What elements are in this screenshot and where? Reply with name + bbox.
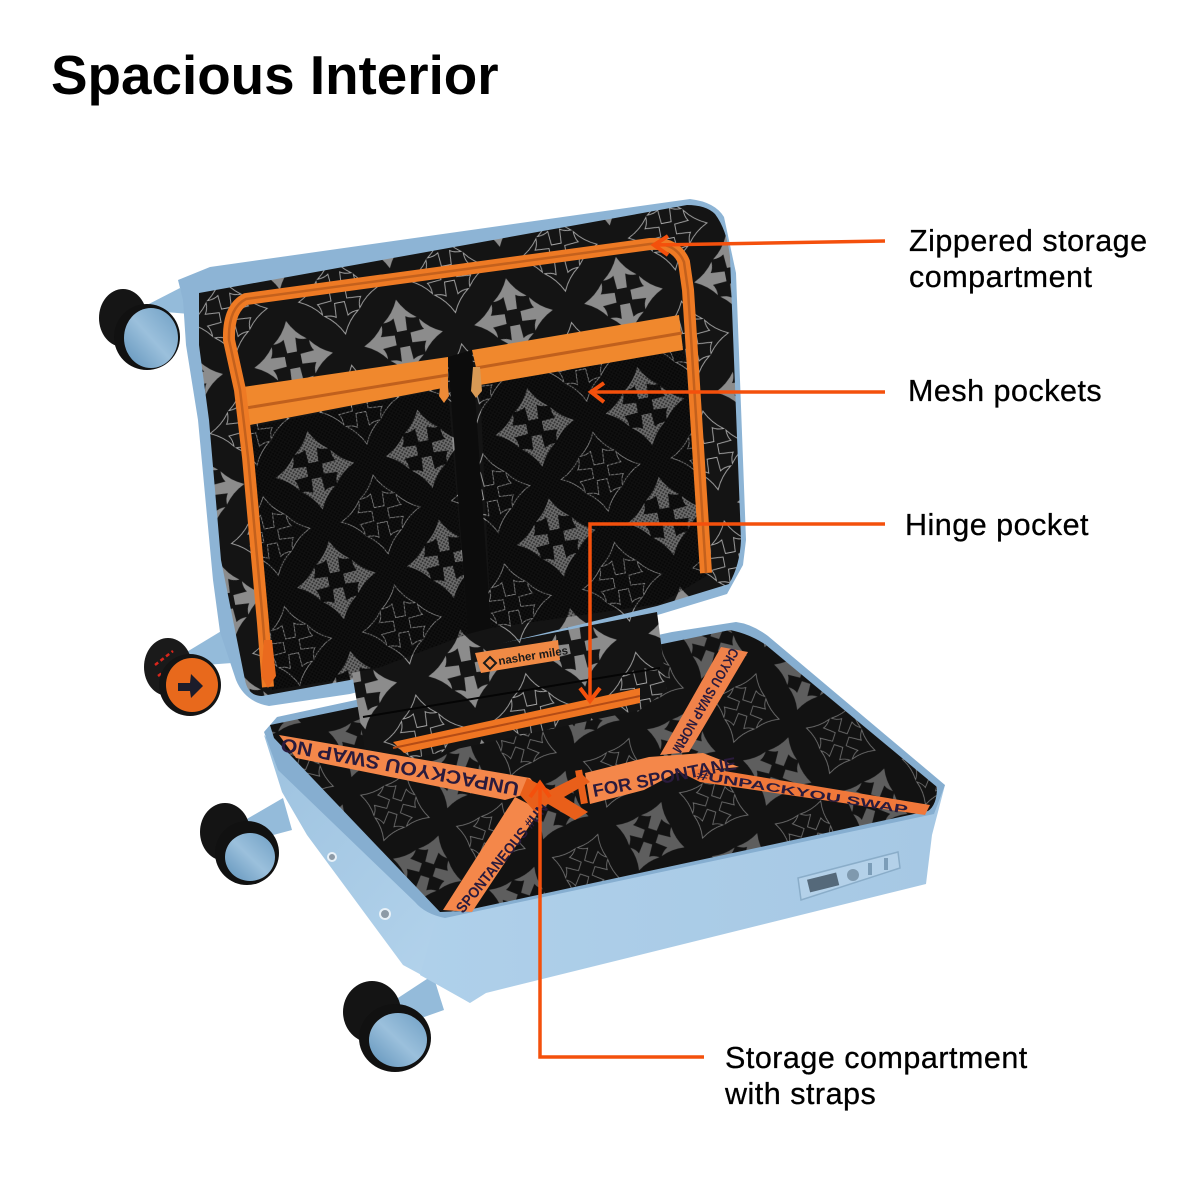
straps: SPONTANEOUS #UN [453, 800, 552, 917]
label: storage compartment with straps: Storage compartment [725, 1041, 1028, 1075]
zipper: lid perimeter [229, 244, 706, 688]
straps: UNPACKYOU SWAP NO [279, 733, 521, 799]
icon: front lower wheel [343, 975, 444, 1072]
straps: CKYOU SWAP NORM [669, 646, 742, 756]
straps: #UNPACKYOU SWAP [696, 768, 909, 817]
buckle [520, 770, 590, 820]
label: zippered storage compartment: compartment [909, 260, 1093, 294]
icon: rear lower wheel with orange hub [144, 630, 232, 716]
arrow: zippered storage compartment [654, 236, 885, 255]
label: storage compartment with straps: with straps [724, 1077, 876, 1111]
straps: FOR SPONTANE [591, 753, 738, 801]
label: zippered storage compartment: Zippered storage [909, 224, 1148, 258]
lid lining [199, 205, 741, 696]
icon: front upper wheel [200, 798, 292, 885]
base rim [264, 622, 945, 918]
arrow: storage compartment with straps [530, 783, 704, 1057]
brand label [475, 640, 569, 673]
rivets [328, 853, 390, 919]
label: mesh pockets: Mesh pockets [908, 374, 1102, 408]
straps [279, 646, 930, 917]
arrow: hinge pocket [580, 524, 885, 701]
brand label: nasher miles [498, 645, 569, 668]
mesh pockets [243, 315, 708, 690]
base lining [270, 630, 937, 912]
label: hinge pocket: Hinge pocket [905, 508, 1089, 542]
icon: rear top wheel [99, 288, 190, 370]
lid shell [178, 199, 746, 706]
hinge pocket [352, 612, 667, 760]
base shell side [264, 735, 500, 1003]
title: Spacious Interior [51, 44, 499, 106]
base shell front [420, 785, 945, 1003]
arrow: mesh pockets [591, 383, 885, 402]
combination lock [798, 852, 900, 900]
suitcase illustration [99, 199, 945, 1072]
